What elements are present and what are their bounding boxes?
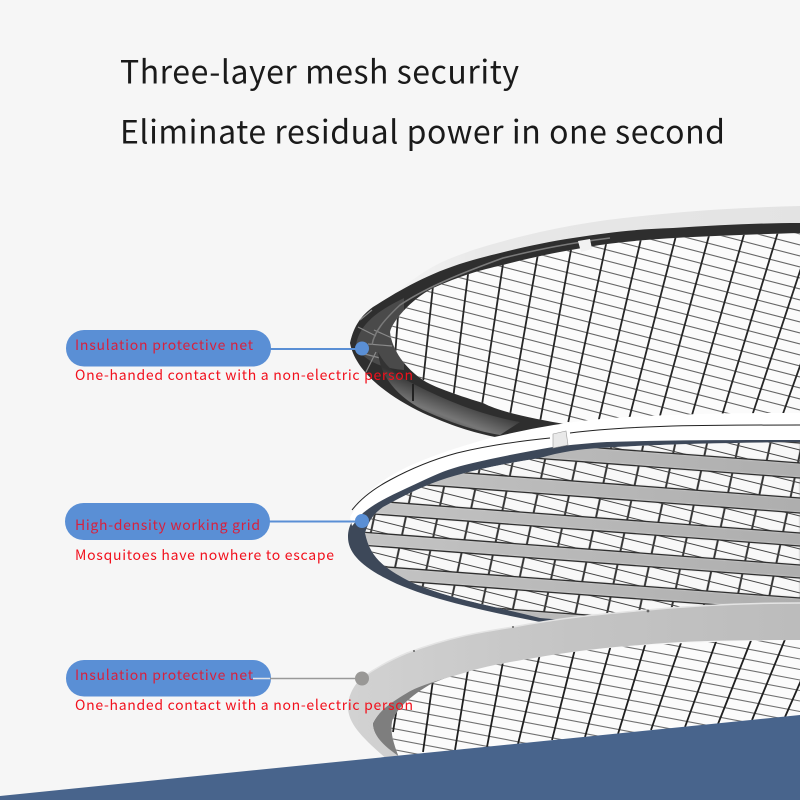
pill label: High-density working grid bbox=[75, 515, 260, 535]
rib lines bbox=[357, 310, 392, 372]
callout: insulation protective net top bbox=[66, 330, 413, 385]
heading line 1: Three-layer mesh security bbox=[120, 48, 519, 94]
heading line 2: Eliminate residual power in one second bbox=[120, 108, 725, 154]
rim latch bbox=[553, 431, 568, 448]
connector line bbox=[270, 348, 362, 350]
slate frame bbox=[348, 438, 800, 640]
description: Mosquitoes have nowhere to escape bbox=[75, 545, 334, 565]
pill label: Insulation protective net bbox=[75, 665, 254, 685]
middle net: high-density working grid bbox=[348, 413, 800, 622]
frame step bbox=[412, 384, 414, 401]
pill bbox=[65, 503, 270, 540]
bottom net: insulation protective net bbox=[348, 602, 800, 757]
top net: insulation protective net bbox=[350, 206, 800, 437]
dark frame bbox=[350, 223, 800, 440]
lower grey band bbox=[378, 352, 520, 435]
blue base panel bbox=[0, 715, 800, 800]
callout: insulation protective net bottom bbox=[66, 660, 413, 715]
title bbox=[120, 48, 725, 154]
outer rim bbox=[348, 603, 800, 762]
inner frame curve bbox=[372, 238, 610, 345]
description: One-handed contact with a non-electric person bbox=[75, 365, 413, 385]
inner grey band bbox=[373, 672, 560, 765]
clip tab bbox=[578, 239, 592, 252]
white rim bbox=[350, 413, 800, 526]
connector dot bbox=[355, 514, 369, 528]
pill bbox=[66, 660, 271, 696]
mesh bbox=[392, 640, 800, 756]
rim screw marks bbox=[413, 610, 649, 652]
connector line bbox=[253, 678, 362, 680]
left rib band bbox=[356, 298, 404, 370]
mesh with grey bands bbox=[365, 442, 800, 620]
mesh bbox=[390, 233, 800, 424]
pill bbox=[66, 330, 271, 366]
rim top highlight bbox=[363, 603, 800, 677]
description: One-handed contact with a non-electric person bbox=[75, 695, 413, 715]
pill label: Insulation protective net bbox=[75, 335, 254, 355]
connector dot bbox=[355, 672, 369, 686]
connector dot bbox=[355, 342, 369, 356]
rim groove line bbox=[352, 425, 800, 510]
callout: high-density working grid bbox=[65, 503, 369, 565]
connector line bbox=[269, 520, 362, 522]
outer rim bbox=[350, 206, 800, 343]
